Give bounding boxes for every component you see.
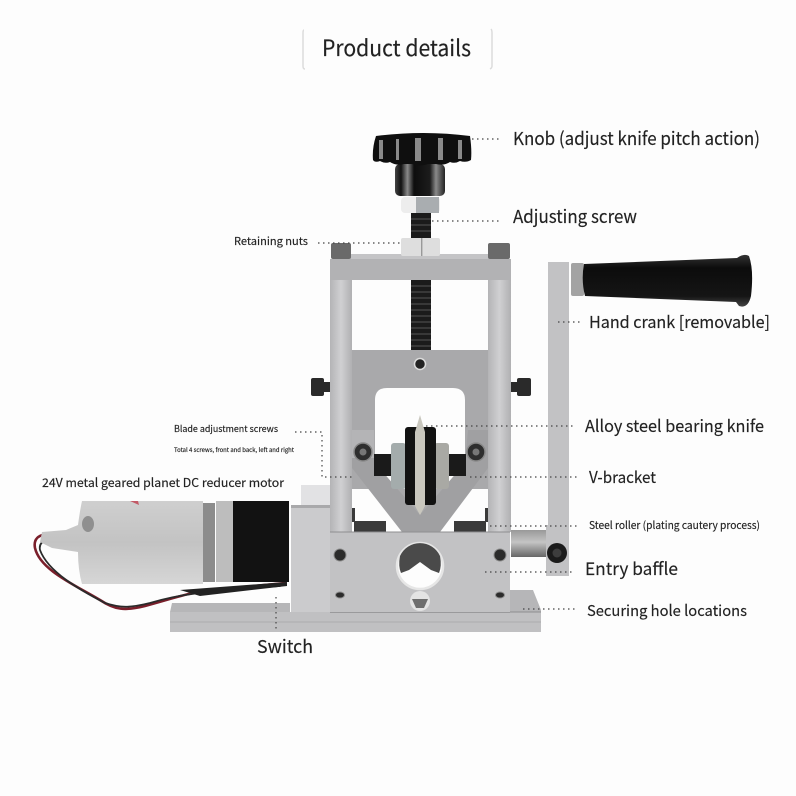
securing hole — [410, 591, 430, 611]
main frame columns — [330, 254, 511, 532]
plate hole — [414, 358, 426, 370]
motor — [40, 501, 289, 596]
hand crank — [546, 255, 752, 576]
label: v-bracket: V-bracket — [589, 464, 656, 488]
label: adjusting screw: Adjusting screw — [513, 203, 637, 229]
bearing knife assembly — [374, 415, 466, 515]
knob — [373, 133, 471, 196]
label: total screws note: Total 4 screws, front and back, left and right — [174, 445, 295, 454]
leader lines — [276, 139, 580, 632]
label: retaining nuts: Retaining nuts — [234, 234, 308, 249]
switch housing — [291, 485, 330, 612]
label: entry baffle: Entry baffle — [585, 555, 678, 580]
entry hole — [397, 543, 443, 589]
title bracket frame — [303, 29, 492, 69]
V-bracket — [352, 430, 488, 532]
label: securing holes: Securing hole locations — [587, 600, 747, 621]
label: hand crank: Hand crank [removable] — [589, 309, 770, 333]
label: switch: Switch — [257, 633, 313, 659]
entry baffle block — [330, 532, 510, 613]
lower dark strips — [352, 508, 488, 532]
label: bearing knife: Alloy steel bearing knife — [585, 413, 764, 437]
label: blade adjustment screws: Blade adjustment screws — [174, 422, 278, 435]
base plate — [170, 590, 541, 632]
label: motor: 24V metal geared planet DC reducer motor — [42, 474, 284, 491]
block screws — [334, 549, 506, 598]
top corner screws — [331, 243, 510, 259]
sliding plate — [352, 350, 488, 522]
title: Product details — [322, 31, 471, 63]
motor wires — [35, 533, 285, 609]
label: steel roller: Steel roller (plating cautery process) — [589, 518, 760, 533]
steel roller — [511, 530, 547, 557]
side screws — [311, 378, 531, 396]
label: knob: Knob (adjust knife pitch action) — [513, 125, 760, 151]
retaining nuts — [401, 197, 440, 256]
adjusting screw — [411, 213, 431, 352]
machine illustration — [35, 133, 752, 632]
